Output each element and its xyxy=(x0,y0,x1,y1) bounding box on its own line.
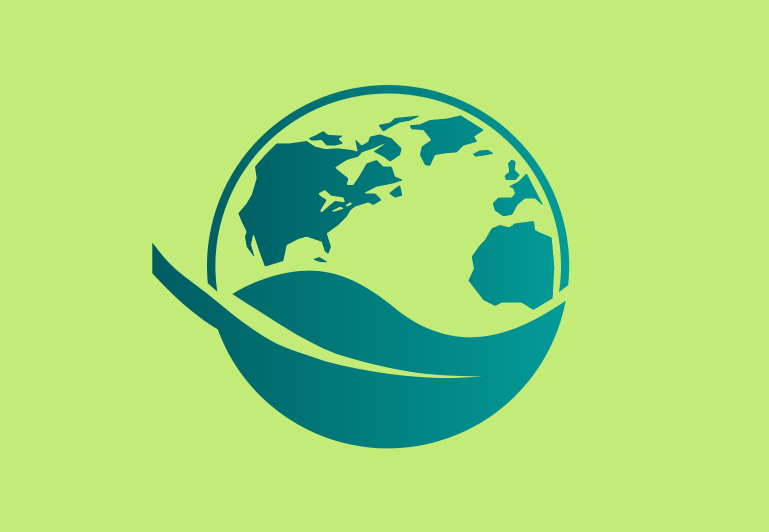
Cuba xyxy=(313,257,328,262)
Europe xyxy=(493,173,544,216)
North America xyxy=(238,134,403,267)
leaf with stem xyxy=(152,243,566,448)
continents: Greenland, Europe and Africa xyxy=(409,115,554,310)
globe outline ring xyxy=(207,85,569,292)
Newfoundland xyxy=(389,185,402,198)
northern island xyxy=(378,115,421,132)
Africa xyxy=(468,221,554,310)
Arctic island xyxy=(308,131,343,146)
Greenland xyxy=(409,115,484,166)
British Isles xyxy=(504,159,520,180)
Iceland xyxy=(473,150,494,157)
continents: North America and northern islands xyxy=(238,115,421,267)
